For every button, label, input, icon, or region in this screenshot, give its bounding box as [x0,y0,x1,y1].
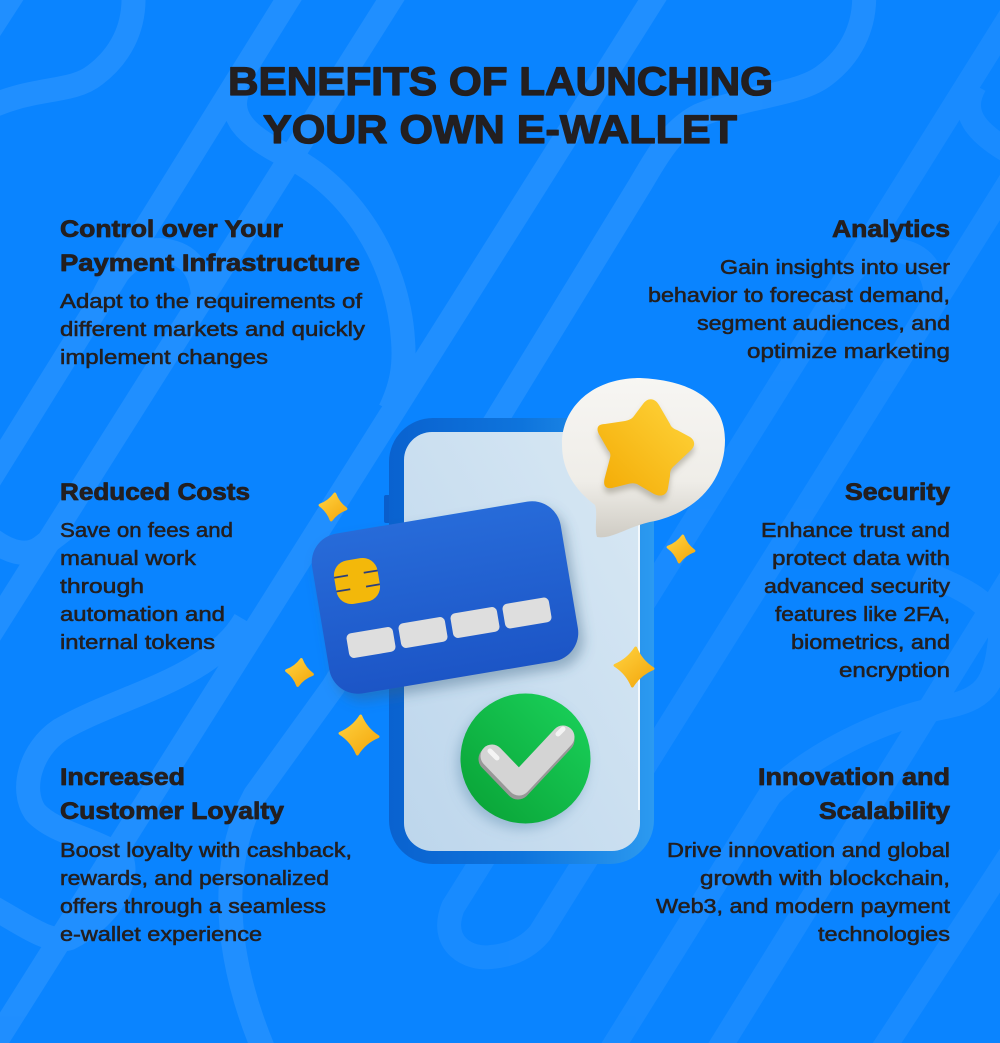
panel: increased customer loyalty: offers through a seamless [60,896,326,918]
icon: sparkle 1 [318,492,348,522]
panel: security [761,479,951,682]
panel: security: Security [845,479,951,506]
icon: credit card [307,497,588,705]
panel: security: Enhance trust and [761,520,950,542]
icon: check badge [457,694,590,829]
panel: control over your payment infrastructure [60,216,365,369]
icon: sparkle 2 [666,534,696,564]
illustration: phone with card, badge and sparkles [285,378,725,864]
panel: security: protect data with [772,548,950,570]
panel: innovation and scalability: Scalability [819,798,951,825]
panel: control over your payment infrastructure: Adapt to the requirements of [60,291,363,313]
panel: reduced costs: manual work [60,548,197,570]
panel: increased customer loyalty: Increased [60,764,185,791]
icon: phone [384,418,654,864]
panel: innovation and scalability: technologies [818,924,950,946]
icon: speech bubble with star [562,378,725,537]
panel: increased customer loyalty: Customer Loyalty [60,798,285,825]
title: BENEFITS OF LAUNCHING [228,60,773,104]
panel: analytics: optimize marketing [747,341,950,363]
panel: control over your payment infrastructure: different markets and quickly [60,319,365,341]
panel: increased customer loyalty: rewards, and personalized [60,868,329,890]
icon: sparkle 3 [285,658,314,687]
icon: star [598,399,694,501]
panel: reduced costs [60,479,250,654]
panel: analytics: behavior to forecast demand, [648,285,950,307]
panel: analytics: Analytics [832,216,950,243]
panel: analytics: Gain insights into user [720,257,950,279]
icon: card chip [332,556,382,606]
panel: security: advanced security [764,576,950,598]
panel: increased customer loyalty: Boost loyalty with cashback, [60,840,352,862]
panel: reduced costs: internal tokens [60,632,215,654]
panel: innovation and scalability [656,764,951,946]
panel: increased customer loyalty [60,764,352,946]
panel: innovation and scalability: Drive innovation and global [667,840,950,862]
title [228,60,773,152]
panel: security: features like 2FA, [775,604,950,626]
panel: reduced costs: Reduced Costs [60,479,250,506]
panel: control over your payment infrastructure: implement changes [60,347,268,369]
panel: analytics [648,216,950,363]
panel: reduced costs: automation and [60,604,225,626]
panel: innovation and scalability: Innovation and [758,764,950,791]
panel: innovation and scalability: growth with blockchain, [700,868,950,890]
card number blocks [346,597,552,659]
panel: security: encryption [839,660,950,682]
panel: control over your payment infrastructure: Payment Infrastructure [60,250,360,277]
panel: analytics: segment audiences, and [697,313,950,335]
icon: sparkle 5 [338,714,380,756]
panel: control over your payment infrastructure: Control over Your [60,216,283,243]
icon: sparkle 4 [613,646,655,688]
title: YOUR OWN E-WALLET [263,108,737,152]
panel: security: biometrics, and [791,632,950,654]
panel: reduced costs: through [60,576,144,598]
panel: increased customer loyalty: e-wallet experience [60,924,262,946]
panel: innovation and scalability: Web3, and modern payment [656,896,951,918]
panel: reduced costs: Save on fees and [60,520,233,542]
